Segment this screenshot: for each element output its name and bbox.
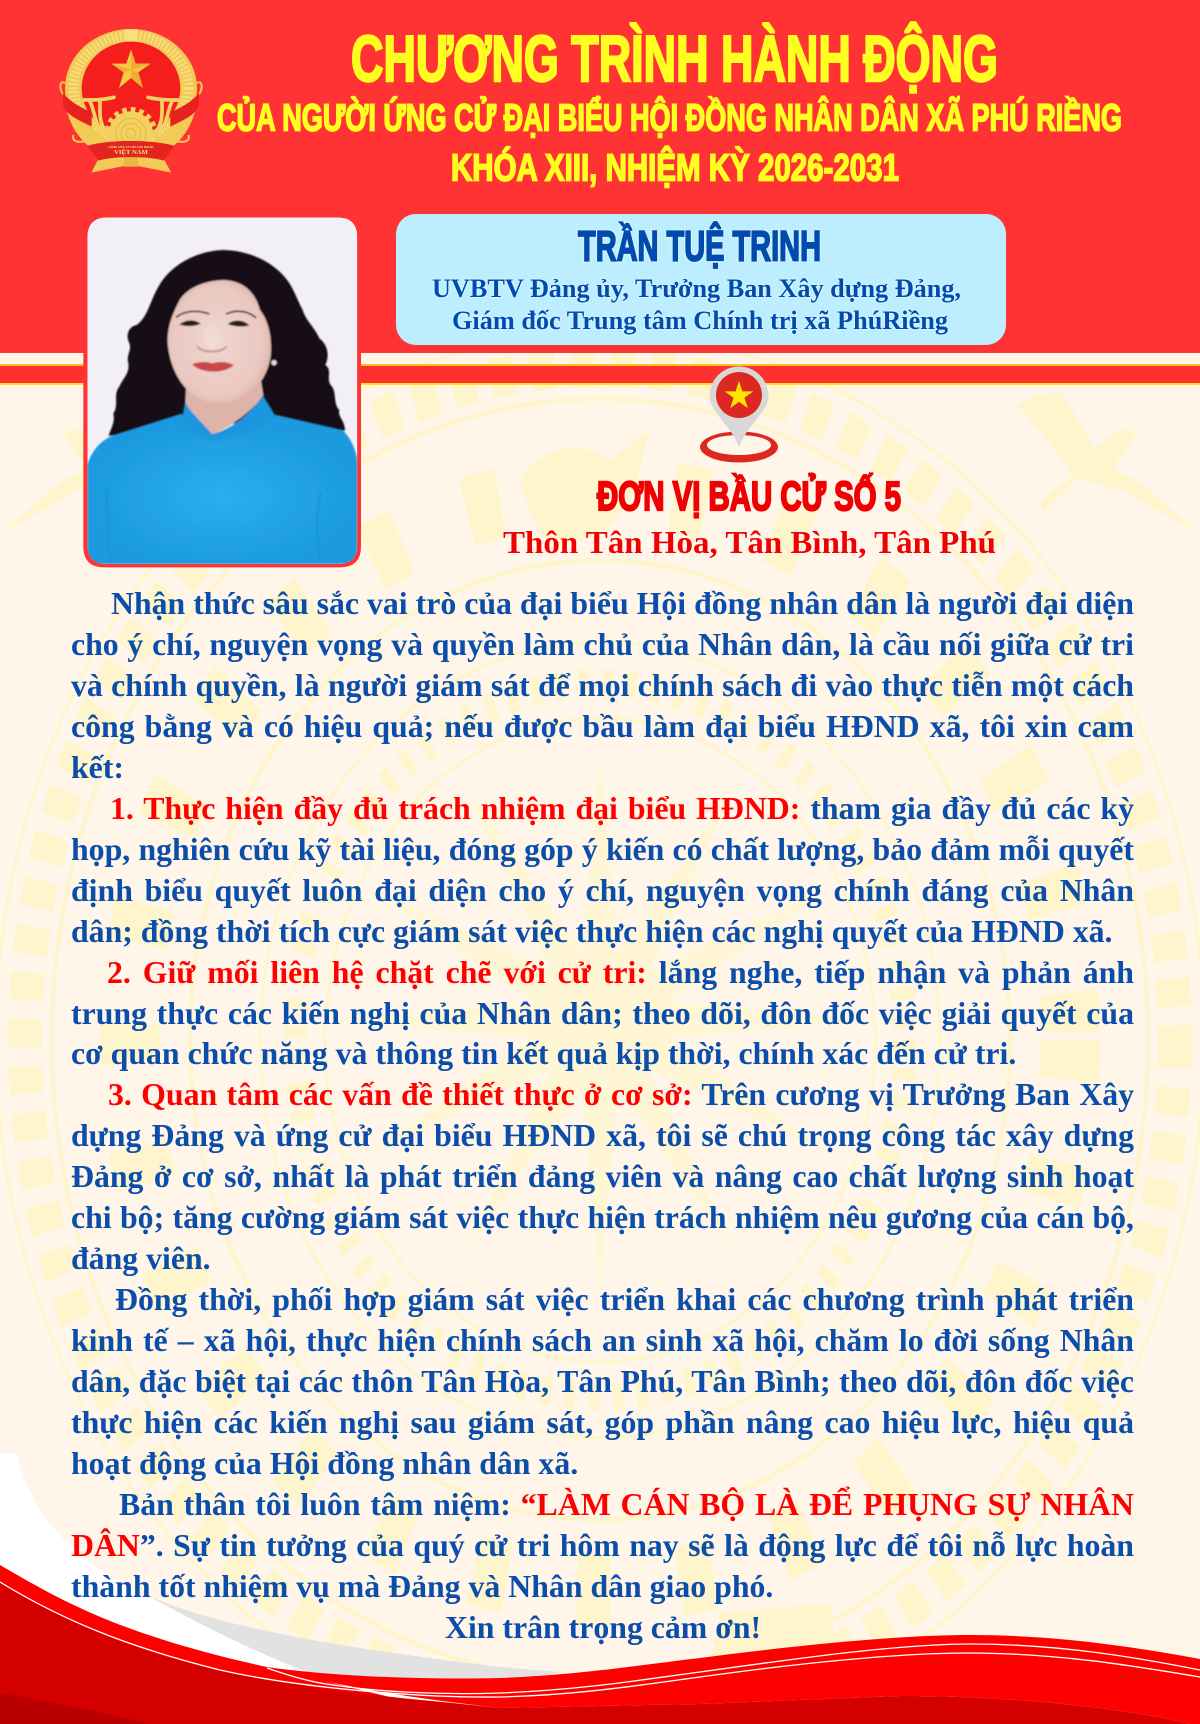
paragraph: commitment 2: trung thực các kiến nghị của Nhân dân; theo dõi, đôn đốc việc giải quyết của [71, 996, 1134, 1031]
paragraph: coordination: dân, đặc biệt tại các thôn Tân Hòa, Tân Phú, Tân Bình; theo dõi, đôn đốc việc [71, 1364, 1134, 1399]
paragraph: coordination: thực hiện các kiến nghị sau giám sát, góp phần nâng cao hiệu lực, hiệu quả [71, 1405, 1134, 1440]
portrait photo [83, 214, 361, 567]
icon: location pin with ring [700, 366, 778, 462]
panel: candidate name and title [396, 214, 1006, 345]
candidate name: TRẦN TUỆ TRINH [578, 222, 821, 270]
paragraph: opening commitment: công bằng và có hiệu quả; nếu được bầu làm đại biểu HĐND xã, tôi xin cam [71, 709, 1134, 744]
paragraph: opening commitment: và chính quyền, là người giám sát để mọi chính sách đi vào thực tiễn một cách [71, 668, 1134, 703]
paragraph: commitment 3: 3. Quan tâm các vấn đề thiết thực ở cơ sở: Trên cương vị Trưởng Ban Xây [108, 1077, 1134, 1112]
paragraph: commitment 2: 2. Giữ mối liên hệ chặt chẽ với cử tri: lắng nghe, tiếp nhận và phản ánh [107, 955, 1134, 990]
paragraph: commitment 3 [71, 1077, 1134, 1276]
hair [109, 250, 345, 436]
face [168, 280, 271, 403]
subtitle line: term: KHÓA XIII, NHIỆM KỲ 2026-2031 [451, 146, 899, 190]
paragraph: commitment 2 [71, 955, 1134, 1071]
paragraph: commitment 1: dân; đồng thời tích cực giám sát việc thực hiện các nghị quyết của HĐND xã. [71, 914, 1112, 949]
paragraph: motto: DÂN”. Sự tin tưởng của quý cử tri hôm nay sẽ là động lực để tôi nỗ lực hoàn [71, 1528, 1134, 1563]
paragraph: commitment 1: định biểu quyết luôn đại diện cho ý chí, nguyện vọng chính đáng của Nhân [71, 873, 1134, 908]
paragraph: opening commitment: Nhận thức sâu sắc vai trò của đại biểu Hội đồng nhân dân là người đại diện [111, 586, 1134, 621]
paragraph: motto [71, 1486, 1134, 1604]
paragraph: motto: thành tốt nhiệm vụ mà Đảng và Nhân dân giao phó. [71, 1569, 773, 1604]
neck [185, 373, 263, 435]
lips [192, 362, 234, 372]
paragraph: commitment 1: họp, nghiên cứu kỹ tài liệu, đóng góp ý kiến có chất lượng, bảo đảm mỗi quyết [71, 832, 1134, 867]
eyes [179, 320, 201, 326]
national emblem: CỘNG HÒA XÃ HỘI CHỦ NGHĨA [108, 144, 154, 149]
paragraph: opening commitment: cho ý chí, nguyện vọng và quyền làm chủ của Nhân dân, là cầu nối giữa cử tri [71, 627, 1134, 662]
paragraph: commitment 3: đảng viên. [71, 1241, 211, 1276]
header ribbon bands [0, 364, 1200, 385]
nose [197, 346, 227, 351]
candidate positions: Giám đốc Trung tâm Chính trị xã PhúRiềng [452, 306, 948, 335]
paragraph: commitment 3: chi bộ; tăng cường giám sát việc thực hiện trách nhiệm nêu gương của cán bộ, [71, 1200, 1134, 1235]
national emblem: VIỆT NAM [114, 148, 149, 156]
paragraph: commitment 1: 1. Thực hiện đầy đủ trách nhiệm đại biểu HĐND: tham gia đầy đủ các kỳ [110, 791, 1134, 826]
collar [182, 395, 275, 441]
earring [271, 360, 277, 365]
paragraph: commitment 3: dựng Đảng và ứng cử đại biểu HĐND xã, tôi sẽ chú trọng công tác xây dựng [71, 1118, 1134, 1153]
paragraph: commitment 2: cơ quan chức năng và thông tin kết quả kịp thời, chính xác đến cử tri. [71, 1036, 1016, 1071]
paragraph: opening commitment: kết: [71, 750, 124, 785]
heading: electoral unit: ĐƠN VỊ BẦU CỬ SỐ 5 [597, 473, 901, 519]
national emblem [60, 29, 202, 173]
body text: action programme [71, 586, 1134, 1645]
text: electoral unit villages: Thôn Tân Hòa, Tân Bình, Tân Phú [503, 524, 996, 560]
closing thanks: Xin trân trọng cảm ơn! [445, 1610, 761, 1645]
paragraph: coordination: kinh tế – xã hội, thực hiện chính sách an sinh xã hội, chăm lo đời sống Nhân [71, 1323, 1134, 1358]
paragraph: commitment 1 [71, 791, 1134, 949]
header red panel [0, 0, 1200, 353]
eyebrows [176, 311, 209, 317]
paragraph: coordination: Đồng thời, phối hợp giám sát việc triển khai các chương trình phát triển [115, 1282, 1134, 1317]
candidate positions: UVBTV Đảng ủy, Trưởng Ban Xây dựng Đảng, [432, 274, 961, 303]
paragraph: motto: Bản thân tôi luôn tâm niệm: “LÀM CÁN BỘ LÀ ĐỂ PHỤNG SỰ NHÂN [119, 1487, 1134, 1522]
paragraph: coordination [71, 1282, 1134, 1481]
paragraph: coordination: hoạt động của Hội đồng nhân dân xã. [71, 1446, 578, 1481]
paragraph: opening commitment [71, 586, 1134, 785]
bottom wave decoration [0, 1453, 1200, 1724]
candidate positions [432, 274, 961, 335]
body: blue ao dai [87, 414, 357, 564]
paragraph: commitment 3: Đảng ở cơ sở, nhất là phát triển đảng viên và nâng cao chất lượng sinh hoạt [71, 1159, 1134, 1194]
